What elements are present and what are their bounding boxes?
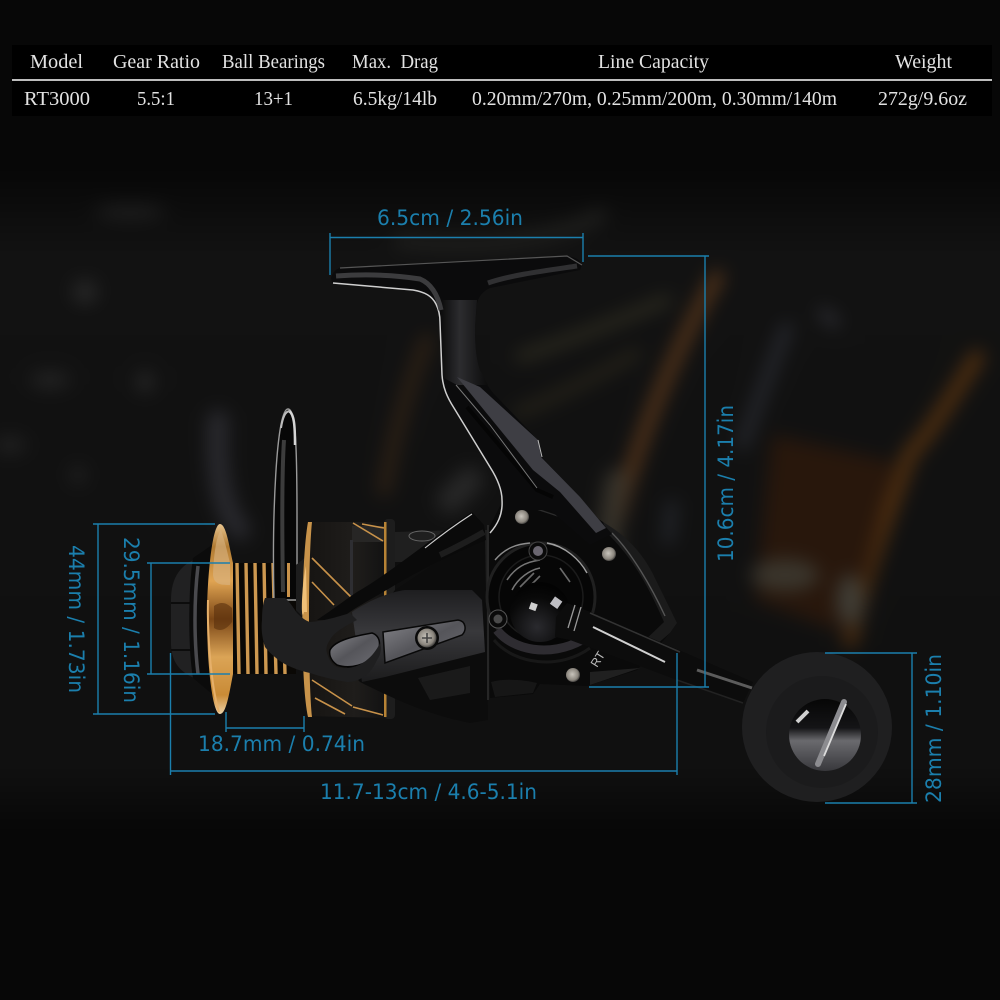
spool stem arm [331, 256, 612, 545]
data row: 13+1 [254, 88, 293, 110]
data row: 0.20mm/270m, 0.25mm/200m, 0.30mm/140m [472, 88, 837, 110]
spool threads [228, 563, 296, 674]
data row: RT3000 [24, 88, 90, 110]
dimension: handle width 6.5cm: 6.5cm / 2.56in [377, 206, 523, 230]
handle arm [555, 603, 753, 703]
dimension: spool width 18.7mm: 18.7mm / 0.74in [198, 732, 365, 756]
gear housing rings [487, 543, 595, 662]
spool front flange [207, 524, 233, 714]
dimension: spool core 29.5mm: 29.5mm / 1.16in [119, 537, 143, 703]
header row: Ball Bearings [222, 51, 325, 73]
dimension: body length 11.7-13cm: 11.7-13cm / 4.6-5.1in [320, 780, 537, 804]
dimension: knob diameter 28mm: 28mm / 1.10in [922, 654, 946, 803]
lower rotor strut [418, 666, 470, 700]
handle knob [742, 652, 892, 802]
data row: 5.5:1 [137, 88, 175, 110]
rotor cup body [340, 530, 488, 723]
skirted spool body [302, 519, 395, 719]
spool knob [171, 545, 212, 694]
fishing reel illustration [171, 256, 892, 802]
bail arm highlight [425, 514, 484, 555]
header row: Weight [895, 51, 952, 73]
window screw [415, 626, 439, 650]
plate lettering: RT [588, 648, 608, 670]
dimension: spool diameter 44mm [64, 524, 215, 714]
dimension: spool diameter 44mm: 44mm / 1.73in [64, 545, 88, 693]
line roller elbow [262, 598, 381, 682]
header row: Model [30, 51, 83, 73]
gray rotor plate [352, 590, 485, 682]
dimension: handle width 6.5cm [330, 206, 583, 275]
header row: Max. Drag [352, 51, 438, 73]
plate lettering [588, 629, 637, 670]
dimension: body length 11.7-13cm [170, 653, 677, 804]
header row: Line Capacity [598, 51, 709, 73]
data row: 6.5kg/14lb [353, 88, 437, 110]
side plate body [488, 490, 677, 700]
data row [24, 88, 967, 110]
dimension: spool core 29.5mm [119, 537, 230, 703]
upper bail arm tube [317, 512, 486, 620]
plate lettering: D [621, 629, 637, 644]
rotor bridge [395, 530, 490, 602]
header row: Gear Ratio [113, 51, 200, 73]
rotor ball [510, 582, 570, 642]
line roller lobe [330, 633, 380, 667]
plate screws [489, 508, 618, 684]
gray window plate [383, 620, 465, 663]
header row [30, 51, 952, 73]
specifications table [12, 45, 992, 116]
bail wire [274, 409, 297, 600]
data row: 272g/9.6oz [878, 88, 967, 110]
dimension: spool width 18.7mm [198, 712, 365, 756]
dimension: height 10.6cm [588, 256, 738, 687]
small shaft behind bail [296, 556, 306, 620]
dimension: height 10.6cm: 10.6cm / 4.17in [714, 405, 738, 562]
dimension: knob diameter 28mm [825, 653, 946, 803]
